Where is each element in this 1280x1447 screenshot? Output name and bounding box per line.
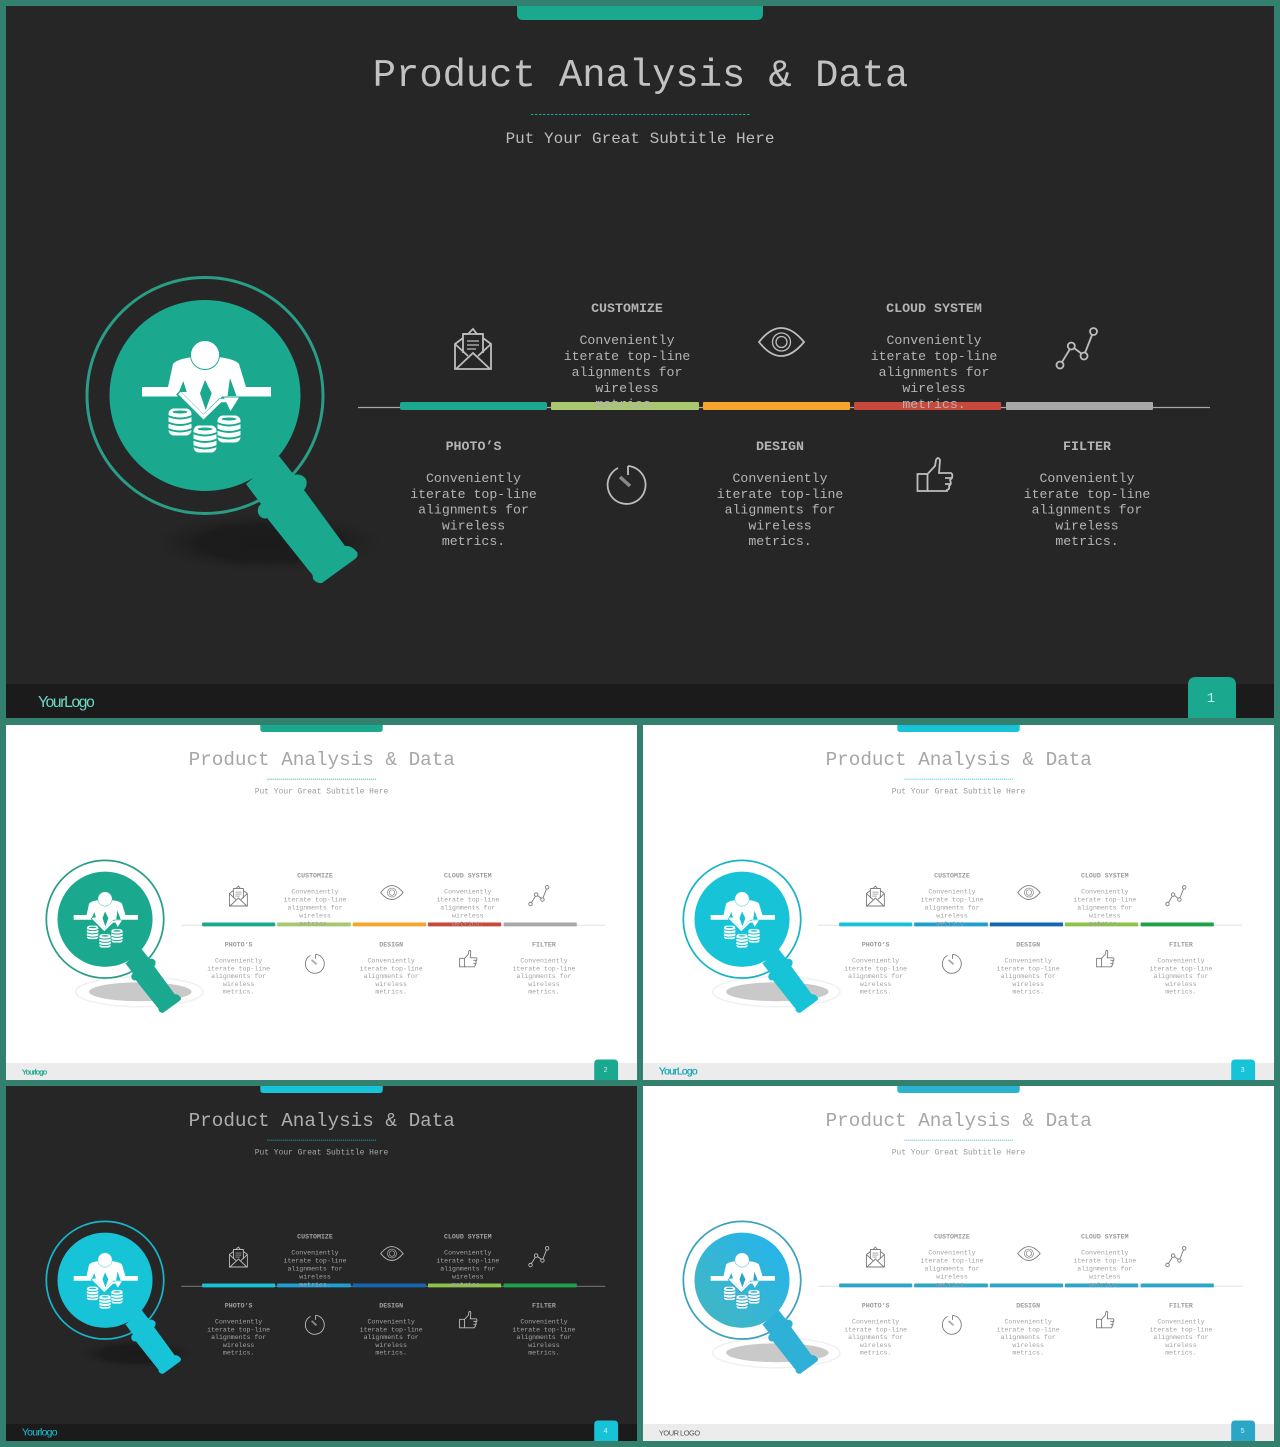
icon: eye [381, 1247, 403, 1261]
slide background [6, 6, 1274, 718]
block: filter: iterate top-line [1149, 1326, 1212, 1333]
block: cloud system: CLOUD SYSTEM [444, 1233, 492, 1241]
block: design: metrics. [1012, 989, 1044, 996]
block: design: DESIGN [1016, 1301, 1040, 1309]
block: design [997, 940, 1060, 996]
block: design [997, 1301, 1060, 1357]
block: photos: iterate top-line [410, 487, 537, 502]
block: photos: wireless [442, 518, 505, 534]
block: filter: wireless [1165, 1342, 1197, 1349]
block: filter: Conveniently [520, 1318, 568, 1325]
block: filter: iterate top-line [1149, 965, 1212, 972]
block: cloud system: wireless [1089, 912, 1121, 919]
block: photos: wireless [860, 981, 891, 988]
block: filter: metrics. [1165, 989, 1197, 996]
block: filter: metrics. [528, 1350, 560, 1357]
block: photos: iterate top-line [207, 1326, 270, 1333]
icon: thumbs up [460, 1311, 477, 1328]
block: design: Conveniently [1005, 957, 1052, 964]
block: customize: wireless [936, 912, 968, 919]
block: filter: wireless [528, 981, 560, 988]
block: customize: alignments for [924, 904, 980, 911]
block: photos: Conveniently [215, 1318, 262, 1325]
block: customize: iterate top-line [284, 896, 347, 904]
top tab [897, 725, 1020, 732]
icon: eye [381, 886, 403, 900]
block: cloud system [1073, 872, 1136, 927]
title: Product Analysis & Data [826, 1110, 1092, 1132]
icon: line graph [1166, 886, 1186, 906]
timeline bars [181, 922, 605, 926]
block: customize: wireless [936, 1273, 968, 1280]
block: customize: CUSTOMIZE [934, 1233, 970, 1241]
block: cloud system: metrics. [902, 397, 966, 412]
block: cloud system: CLOUD SYSTEM [1081, 1233, 1129, 1241]
block: design [360, 940, 423, 996]
block: photos [844, 940, 907, 996]
page number tab: 2 [604, 1067, 608, 1075]
icon: timer [608, 466, 646, 504]
magnifier illustration [46, 1221, 199, 1374]
block: cloud system: alignments for [1077, 1265, 1132, 1272]
block: cloud system: Conveniently [887, 333, 982, 348]
block: customize [564, 301, 690, 412]
block: customize: Conveniently [580, 333, 675, 348]
icon: eye [1018, 886, 1040, 900]
block: filter: iterate top-line [512, 965, 575, 972]
block: customize: wireless [299, 1273, 331, 1280]
block: photos: PHOTO’S [862, 940, 890, 948]
block: photos: alignments for [211, 973, 266, 980]
block: cloud system [436, 1233, 499, 1288]
icon: envelope [229, 886, 247, 906]
slide 5: white blue gradient [643, 1086, 1274, 1441]
block: design: alignments for [725, 502, 835, 518]
page number tab [1231, 1060, 1255, 1080]
icon: timer [305, 954, 324, 973]
slide 4: dark cyan [6, 1086, 637, 1441]
block: customize: metrics. [936, 1281, 968, 1288]
block: filter: iterate top-line [512, 1326, 575, 1333]
block: design: alignments for [1001, 973, 1056, 980]
logo: YourLogo [38, 694, 94, 711]
block: cloud system: Conveniently [444, 1250, 491, 1257]
logo: Yourlogo [22, 1068, 47, 1077]
block: photos: PHOTO’S [225, 940, 253, 948]
block: filter [1024, 439, 1150, 549]
icon: line graph [529, 886, 549, 906]
block: filter: alignments for [516, 973, 572, 980]
top tab [897, 1086, 1020, 1093]
block: photos: PHOTO’S [225, 1301, 253, 1309]
block: filter: alignments for [1153, 1334, 1209, 1341]
block: customize: Conveniently [928, 1250, 976, 1257]
footer bar [6, 684, 1274, 718]
block: customize: wireless [299, 912, 331, 919]
block: design: DESIGN [756, 439, 804, 454]
block: cloud system: iterate top-line [1073, 1257, 1136, 1265]
subtitle: Put Your Great Subtitle Here [892, 1148, 1025, 1157]
block: photos: Conveniently [852, 1318, 899, 1325]
block: customize: CUSTOMIZE [297, 1233, 333, 1241]
block: photos [207, 940, 270, 996]
block: photos: wireless [223, 981, 254, 988]
block: filter: alignments for [516, 1334, 572, 1341]
block: photos: metrics. [223, 1350, 254, 1357]
timeline bars [818, 922, 1242, 926]
icon: line graph [1166, 1247, 1186, 1267]
block: customize: metrics. [299, 1281, 331, 1288]
block: filter: FILTER [1063, 439, 1111, 454]
block: cloud system [1073, 1233, 1136, 1288]
block: photos: metrics. [860, 989, 891, 996]
block: customize: metrics. [936, 920, 968, 927]
block: filter: metrics. [1055, 534, 1119, 549]
block: filter: metrics. [1165, 1350, 1197, 1357]
block: design: metrics. [1012, 1350, 1044, 1357]
block: design: DESIGN [379, 1301, 403, 1309]
block: filter [512, 940, 575, 996]
icon: envelope [866, 1247, 884, 1267]
block: photos: Conveniently [852, 957, 899, 964]
subtitle: Put Your Great Subtitle Here [506, 130, 774, 148]
block: cloud system: CLOUD SYSTEM [1081, 872, 1129, 880]
block: customize: Conveniently [928, 889, 976, 896]
block: cloud system: wireless [902, 381, 966, 396]
block: cloud system: metrics. [452, 1281, 484, 1288]
logo: Yourlogo [22, 1428, 58, 1439]
title: Product Analysis & Data [826, 749, 1092, 771]
block: customize: metrics. [595, 397, 659, 412]
icon: thumbs up [918, 458, 952, 491]
block: cloud system: alignments for [440, 904, 495, 911]
block: filter: metrics. [528, 989, 560, 996]
block: filter: alignments for [1153, 973, 1209, 980]
block: design [360, 1301, 423, 1357]
title: Product Analysis & Data [373, 54, 908, 98]
block: photos [844, 1301, 907, 1357]
dashed divider [531, 114, 750, 116]
icon: timer [942, 954, 961, 973]
block: photos: iterate top-line [844, 965, 907, 972]
block: photos [410, 439, 537, 549]
icon: thumbs up [1097, 950, 1114, 967]
dashed divider [904, 1139, 1013, 1141]
block: filter [1149, 1301, 1212, 1357]
block: photos: iterate top-line [207, 965, 270, 972]
timeline bars [181, 1283, 605, 1287]
block: design: alignments for [1001, 1334, 1056, 1341]
block: cloud system: wireless [452, 1273, 484, 1280]
block: design: Conveniently [368, 957, 415, 964]
title: Product Analysis & Data [189, 1110, 455, 1132]
block: cloud system: iterate top-line [436, 1257, 499, 1265]
block: photos: wireless [223, 1342, 254, 1349]
top tab [260, 1086, 383, 1093]
block: photos: metrics. [860, 1350, 891, 1357]
block: cloud system: metrics. [452, 920, 484, 927]
block: filter: FILTER [1169, 1301, 1193, 1309]
block: customize: iterate top-line [921, 1257, 984, 1265]
block: design: wireless [375, 1342, 407, 1349]
block: filter: wireless [528, 1342, 560, 1349]
magnifier illustration [683, 1221, 840, 1374]
page number tab [1231, 1421, 1255, 1441]
block: cloud system: alignments for [1077, 904, 1132, 911]
block: cloud system: wireless [1089, 1273, 1121, 1280]
block: customize [921, 1233, 984, 1288]
block: filter: Conveniently [1040, 471, 1135, 486]
block: filter: wireless [1165, 981, 1197, 988]
timeline bars [358, 402, 1210, 410]
block: customize: alignments for [287, 1265, 343, 1272]
subtitle: Put Your Great Subtitle Here [892, 787, 1025, 796]
block: design: Conveniently [368, 1318, 415, 1325]
block: design: Conveniently [1005, 1318, 1052, 1325]
block: cloud system: metrics. [1089, 1281, 1121, 1288]
magnifier illustration [46, 860, 203, 1013]
page number tab: 5 [1241, 1428, 1245, 1436]
block: cloud system: CLOUD SYSTEM [444, 872, 492, 880]
block: customize: Conveniently [291, 889, 339, 896]
block: photos: alignments for [211, 1334, 266, 1341]
block: customize: iterate top-line [284, 1257, 347, 1265]
dashed divider [904, 778, 1013, 780]
block: design [717, 439, 843, 549]
footer bar [6, 1063, 637, 1080]
slide 1: dark teal, large [6, 6, 1274, 718]
block: photos: alignments for [848, 973, 903, 980]
block: filter: FILTER [532, 1301, 556, 1309]
block: filter: Conveniently [520, 957, 568, 964]
block: cloud system: alignments for [440, 1265, 495, 1272]
block: cloud system: CLOUD SYSTEM [886, 301, 982, 316]
slide background [6, 725, 637, 1080]
icon: line graph [1056, 328, 1097, 368]
icon: envelope [866, 886, 884, 906]
block: customize: CUSTOMIZE [297, 872, 333, 880]
block: design: metrics. [375, 1350, 407, 1357]
icon: timer [305, 1315, 324, 1334]
block: design: wireless [375, 981, 407, 988]
block: filter: Conveniently [1157, 957, 1205, 964]
top tab [260, 725, 383, 732]
page number tab: 3 [1241, 1067, 1245, 1075]
block: customize [284, 1233, 347, 1288]
block: design: wireless [1012, 1342, 1044, 1349]
block: design: wireless [748, 518, 812, 534]
block: design: Conveniently [733, 471, 828, 486]
icon: eye [759, 328, 804, 356]
block: cloud system: Conveniently [1081, 1250, 1128, 1257]
block: photos: alignments for [418, 502, 529, 518]
block: design: wireless [1012, 981, 1044, 988]
subtitle: Put Your Great Subtitle Here [255, 787, 388, 796]
block: design: iterate top-line [717, 487, 843, 502]
icon: eye [1018, 1247, 1040, 1261]
footer bar [6, 1424, 637, 1441]
slide 3: white cyan [643, 725, 1274, 1080]
block: photos: Conveniently [426, 471, 521, 486]
block: customize: alignments for [572, 365, 682, 380]
block: design: alignments for [364, 973, 419, 980]
block: filter: wireless [1055, 518, 1119, 534]
title: Product Analysis & Data [189, 749, 455, 771]
block: design: iterate top-line [360, 965, 423, 972]
block: cloud system: iterate top-line [871, 349, 997, 364]
block: design: iterate top-line [997, 965, 1060, 972]
block: customize: CUSTOMIZE [591, 301, 663, 316]
subtitle: Put Your Great Subtitle Here [255, 1148, 388, 1157]
timeline bars [818, 1283, 1242, 1287]
block: cloud system: Conveniently [1081, 889, 1128, 896]
block: design: metrics. [375, 989, 407, 996]
dashed divider [267, 1139, 376, 1141]
block: customize [921, 872, 984, 927]
block: customize: metrics. [299, 920, 331, 927]
block: customize: wireless [595, 381, 659, 396]
block: customize [284, 872, 347, 927]
block: filter: FILTER [532, 940, 556, 948]
block: filter: Conveniently [1157, 1318, 1205, 1325]
block: filter [512, 1301, 575, 1357]
slide background [6, 1086, 637, 1441]
block: cloud system: metrics. [1089, 920, 1121, 927]
block: cloud system: iterate top-line [1073, 896, 1136, 904]
block: cloud system: alignments for [879, 365, 989, 380]
icon: thumbs up [460, 950, 477, 967]
block: customize: CUSTOMIZE [934, 872, 970, 880]
block: cloud system: wireless [452, 912, 484, 919]
block: cloud system: iterate top-line [436, 896, 499, 904]
top tab [517, 6, 763, 20]
icon: line graph [529, 1247, 549, 1267]
block: cloud system: Conveniently [444, 889, 491, 896]
logo: YourLogo [659, 1067, 698, 1078]
block: design: DESIGN [1016, 940, 1040, 948]
block: cloud system [436, 872, 499, 927]
page number tab: 4 [604, 1428, 608, 1436]
block: photos: PHOTO’S [446, 439, 501, 454]
dashed divider [267, 778, 376, 780]
block: design: DESIGN [379, 940, 403, 948]
block: filter: alignments for [1032, 502, 1142, 518]
icon: timer [942, 1315, 961, 1334]
block: design: iterate top-line [360, 1326, 423, 1333]
page number tab [594, 1421, 618, 1441]
slide 2: white teal [6, 725, 637, 1080]
block: customize: Conveniently [291, 1250, 339, 1257]
block: filter: iterate top-line [1024, 487, 1150, 502]
block: photos: Conveniently [215, 957, 262, 964]
block: photos: alignments for [848, 1334, 903, 1341]
magnifier illustration [87, 278, 393, 583]
block: design: iterate top-line [997, 1326, 1060, 1333]
block: photos: iterate top-line [844, 1326, 907, 1333]
block: filter [1149, 940, 1212, 996]
block: customize: iterate top-line [564, 349, 690, 364]
footer bar [643, 1063, 1274, 1080]
block: photos: metrics. [442, 534, 505, 549]
page number tab [1188, 677, 1236, 718]
block: photos [207, 1301, 270, 1357]
block: photos: metrics. [223, 989, 254, 996]
block: design: metrics. [748, 534, 812, 549]
slide background [643, 725, 1274, 1080]
block: cloud system [871, 301, 997, 412]
icon: envelope [229, 1247, 247, 1267]
slide background [643, 1086, 1274, 1441]
icon: thumbs up [1097, 1311, 1114, 1328]
footer bar [643, 1424, 1274, 1441]
page number tab [594, 1060, 618, 1080]
block: filter: FILTER [1169, 940, 1193, 948]
block: photos: wireless [860, 1342, 891, 1349]
logo: YOUR LOGO [659, 1429, 700, 1438]
block: design: alignments for [364, 1334, 419, 1341]
block: customize: alignments for [924, 1265, 980, 1272]
block: customize: iterate top-line [921, 896, 984, 904]
block: customize: alignments for [287, 904, 343, 911]
block: photos: PHOTO’S [862, 1301, 890, 1309]
magnifier illustration [683, 860, 840, 1013]
icon: envelope [455, 329, 491, 369]
page number tab: 1 [1207, 691, 1215, 707]
